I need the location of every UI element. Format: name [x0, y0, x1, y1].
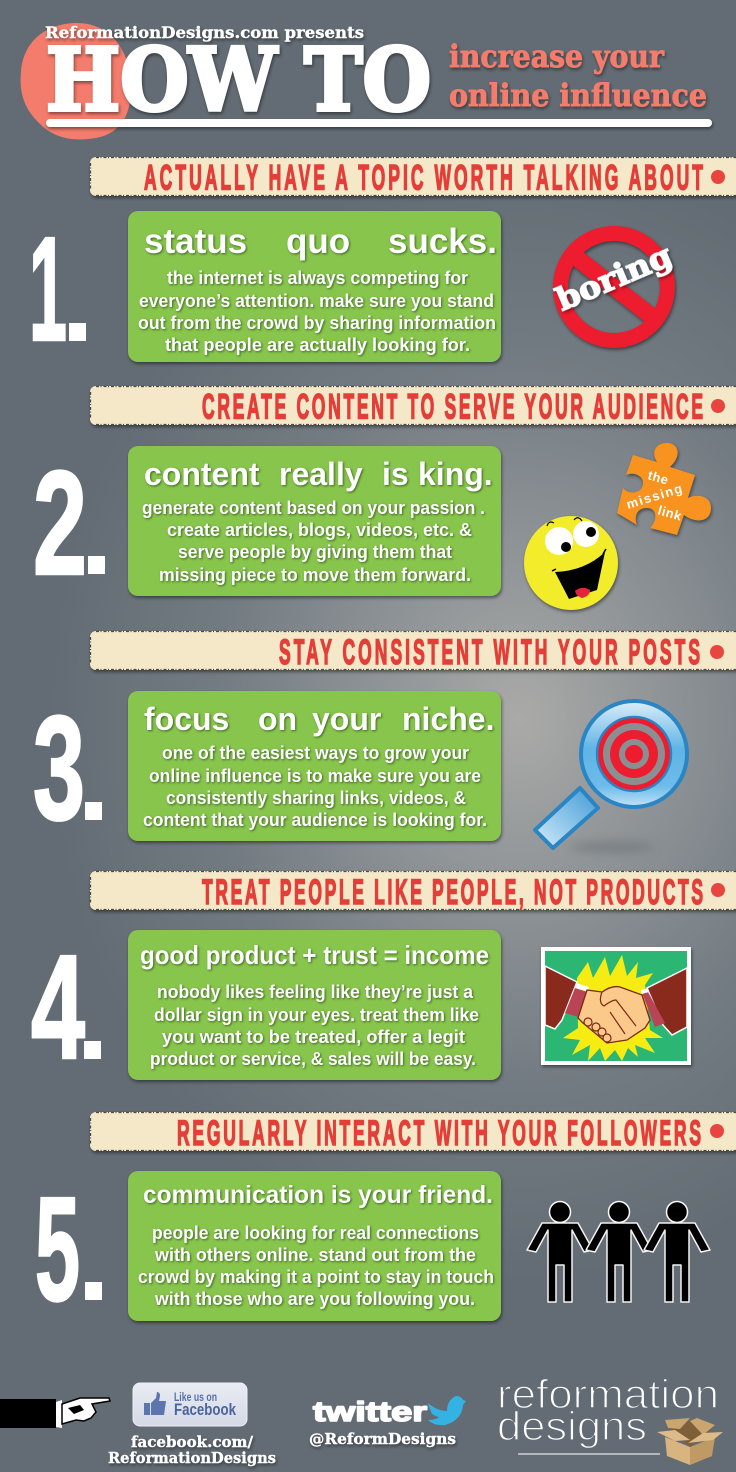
panel body — [138, 1223, 494, 1309]
footer: facebook button: Like us on — [174, 1390, 217, 1404]
icon: handshake picture — [541, 947, 691, 1065]
panel body: online influence is to make sure you are — [149, 766, 481, 786]
footer: reformation designs logo: reformation — [497, 1371, 719, 1417]
number 4: 4 — [31, 925, 85, 1090]
banner 2: CREATE CONTENT TO SERVE YOUR AUDIENCE — [202, 387, 703, 426]
panel body: create articles, blogs, videos, etc. & — [167, 520, 472, 540]
footer: pointing hand — [0, 1398, 110, 1428]
icon: puzzle piece: missing — [624, 480, 685, 512]
banner 5: REGULARLY INTERACT WITH YOUR FOLLOWERS — [177, 1113, 701, 1153]
footer: twitter logo — [313, 1396, 466, 1427]
panel body: missing piece to move them forward. — [159, 565, 471, 585]
panel body: one of the easiest ways to grow your — [162, 743, 469, 763]
panel heading: sucks. — [388, 222, 497, 261]
panel heading: communication is your friend. — [143, 1181, 493, 1209]
coral blob — [21, 23, 131, 139]
footer: twitter handle: @ReformDesigns — [309, 1430, 456, 1448]
footer: twitter logo: twitter — [313, 1396, 427, 1427]
panel heading: really — [279, 456, 363, 492]
panel body: you want to be treated, offer a legit — [162, 1027, 465, 1047]
subtitle: online influence — [449, 78, 707, 114]
footer: facebook address — [108, 1433, 276, 1467]
banner 1: ACTUALLY HAVE A TOPIC WORTH TALKING ABOUT — [144, 158, 703, 197]
bird icon — [428, 1396, 466, 1425]
number 3: 3 — [33, 686, 85, 851]
panel heading: content — [144, 456, 260, 492]
icon: no boring sign — [551, 234, 677, 340]
icon: laughing smiley — [524, 516, 618, 610]
panel heading: status — [144, 222, 247, 261]
panel heading: on — [258, 701, 297, 737]
cardboard box icon — [657, 1418, 723, 1465]
panel body — [138, 268, 496, 355]
panel: content really is king — [128, 446, 501, 596]
panel body — [142, 498, 485, 585]
thumbs up icon — [144, 1392, 166, 1415]
footer: reformation designs logo — [497, 1371, 723, 1465]
panel body: dollar sign in your eyes. treat them like — [154, 1005, 479, 1025]
how to heading: HOW TO — [46, 30, 431, 131]
banner 3 — [90, 631, 736, 672]
panel: good product plus trust — [128, 930, 501, 1080]
subtitle — [449, 39, 707, 114]
panel body: out from the crowd by sharing information — [138, 313, 496, 333]
footer: facebook button — [133, 1383, 247, 1426]
icon: three people holding hands — [527, 1202, 710, 1302]
panel heading: quo — [286, 222, 350, 261]
panel body: everyone’s attention. make sure you stand — [139, 291, 494, 311]
panel heading: is — [382, 456, 409, 492]
panel body: generate content based on your passion . — [142, 498, 485, 518]
title block — [21, 23, 712, 139]
panel: communication is your friend — [128, 1171, 501, 1321]
panel body: people are looking for real connections — [152, 1223, 479, 1243]
panel body: the internet is always competing for — [167, 268, 468, 288]
footer: reformation designs logo: designs — [497, 1403, 647, 1449]
title underline — [46, 119, 712, 127]
panel body: nobody likes feeling like they’re just a — [157, 982, 474, 1002]
panel body: that people are actually looking for. — [165, 335, 470, 355]
panel body: content that your audience is looking for. — [143, 810, 487, 830]
panel body — [150, 982, 479, 1069]
panel body: crowd by making it a point to stay in touch — [138, 1267, 494, 1287]
footer: facebook address: facebook.com/ — [131, 1433, 254, 1451]
presenter line: ReformationDesigns.com presents — [45, 23, 364, 42]
number 1 — [29, 207, 86, 372]
number 2: 2 — [33, 441, 87, 606]
panel: status quo sucks — [128, 211, 501, 362]
number 5: 5 — [35, 1167, 80, 1332]
panel heading: king. — [418, 456, 493, 492]
icon: puzzle piece: the — [646, 467, 670, 488]
icon: puzzle piece — [617, 443, 711, 535]
banner 4: TREAT PEOPLE LIKE PEOPLE, NOT PRODUCTS — [202, 872, 703, 912]
panel body — [143, 743, 487, 830]
footer: facebook address: ReformationDesigns — [108, 1449, 276, 1467]
panel heading: your — [312, 701, 381, 737]
panel heading: niche. — [402, 701, 494, 737]
icon: magnifier with target — [535, 701, 687, 852]
panel heading: focus — [144, 701, 229, 737]
panel body: consistently sharing links, videos, & — [166, 788, 466, 808]
panel body: with others online. stand out from the — [154, 1245, 476, 1265]
banner 3: STAY CONSISTENT WITH YOUR POSTS — [279, 632, 700, 672]
panel body: with those who are you following you. — [154, 1289, 475, 1309]
icon: no boring sign: boring — [551, 238, 677, 318]
panel body: product or service, & sales will be easy. — [150, 1049, 476, 1069]
panel: focus on your niche — [128, 691, 501, 841]
panel heading: good product + trust = income — [140, 940, 489, 970]
panel body: serve people by giving them that — [178, 542, 452, 562]
icon: puzzle piece: link — [656, 502, 684, 524]
number 1: 1 — [29, 207, 67, 372]
footer: facebook button: Facebook — [174, 1400, 236, 1419]
subtitle: increase your — [449, 39, 665, 75]
